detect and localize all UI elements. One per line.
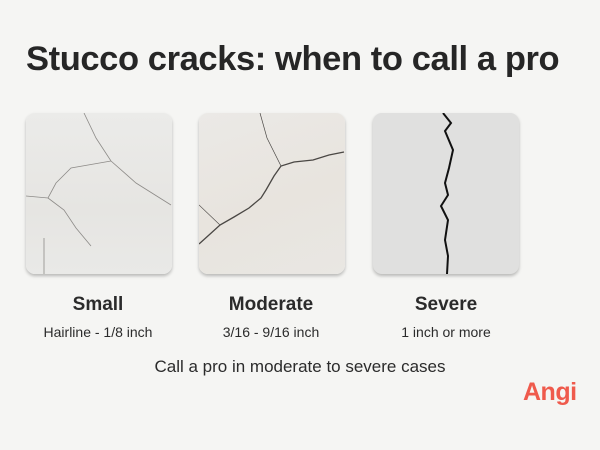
- label: severe: Severe: [415, 294, 477, 315]
- logo: Angi: Angi: [523, 378, 577, 406]
- title: Stucco cracks: when to call a pro: [26, 40, 559, 78]
- sublabel: moderate range: 3/16 - 9/16 inch: [223, 324, 319, 340]
- panel: small crack image: [26, 113, 172, 274]
- sublabel: small range: Hairline - 1/8 inch: [44, 324, 152, 340]
- label: moderate: Moderate: [229, 294, 313, 315]
- panel: severe crack image: [373, 113, 519, 274]
- footer text: Call a pro in moderate to severe cases: [154, 357, 446, 376]
- sublabel: severe range: 1 inch or more: [401, 324, 491, 340]
- label: small: Small: [73, 294, 123, 315]
- panel: moderate crack image: [199, 113, 345, 274]
